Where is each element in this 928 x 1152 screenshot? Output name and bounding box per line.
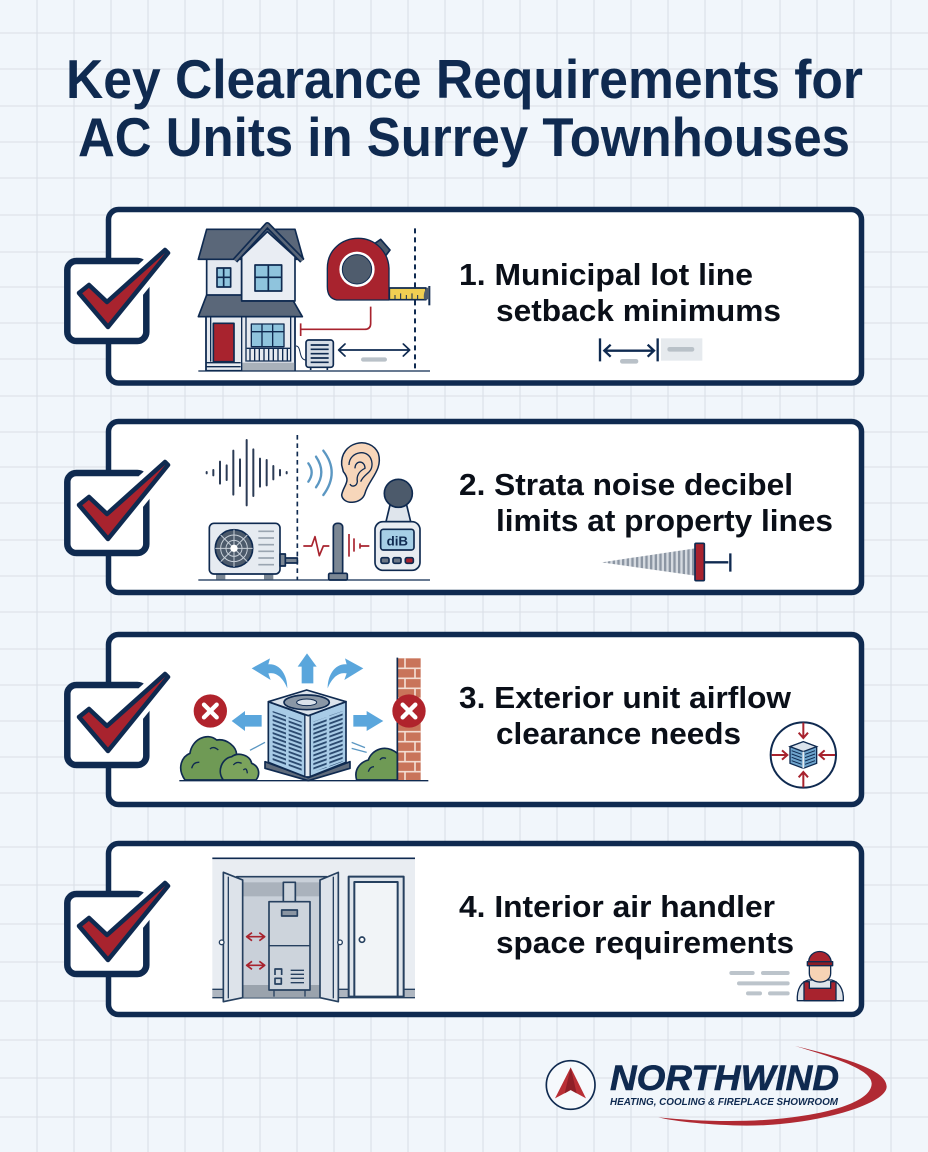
icon: checkbox 1 — [67, 250, 168, 341]
text: item 4: space requirements — [496, 925, 794, 960]
icon: technician with speed lines — [729, 951, 843, 1001]
panel: exterior airflow clearance — [67, 634, 862, 804]
illustration: closet with air handler and door — [212, 858, 415, 1002]
icon: small setback dimension — [600, 338, 702, 364]
icon: small noise cone — [602, 543, 730, 581]
illustration: sound wave, ear, outdoor unit and decibel meter — [198, 435, 430, 580]
title: Key Clearance Requirements for — [66, 48, 863, 110]
logo swoosh — [658, 1046, 887, 1126]
logo tagline: HEATING, COOLING & FIREPLACE SHOWROOM — [610, 1096, 838, 1108]
text: item 2: 2. Strata noise decibel — [459, 467, 793, 502]
illustration: condenser airflow with obstructions — [179, 653, 428, 781]
illustration: sound wave, ear, outdoor unit and decibel meter: diB — [387, 534, 408, 549]
title: AC Units in Surrey Townhouses — [78, 106, 850, 168]
text: item 3 — [459, 680, 792, 751]
text: item 2: limits at property lines — [496, 503, 833, 538]
text: item 2 — [459, 467, 833, 538]
text: item 1: setback minimums — [496, 293, 781, 328]
text: item 1 — [459, 257, 781, 328]
text: item 4: 4. Interior air handler — [459, 889, 775, 924]
icon: checkbox 3 — [67, 674, 168, 765]
text: item 3: clearance needs — [496, 716, 741, 751]
logo: Northwind — [546, 1046, 887, 1126]
text: item 1: 1. Municipal lot line — [459, 257, 753, 292]
title — [66, 48, 863, 168]
logo emblem — [546, 1061, 595, 1109]
icon: checkbox 4 — [67, 883, 168, 974]
text: item 4 — [459, 889, 794, 960]
logo wordmark: NORTHWIND — [610, 1059, 839, 1098]
text: item 3: 3. Exterior unit airflow — [459, 680, 792, 715]
panel: strata noise limits — [67, 422, 862, 592]
panel: interior air handler — [67, 844, 862, 1014]
icon: checkbox 2 — [67, 462, 168, 553]
illustration: house, tape measure and AC setback — [198, 225, 430, 371]
panel: municipal lot line setback — [67, 210, 862, 383]
icon: small clearance circle — [771, 722, 836, 788]
